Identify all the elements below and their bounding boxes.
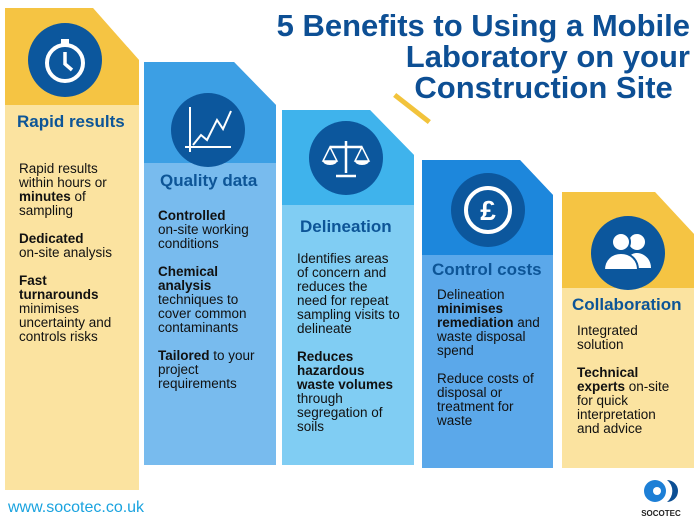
icon: chart xyxy=(171,93,245,167)
heading: Quality data xyxy=(160,171,257,190)
icon: scales xyxy=(309,121,383,195)
logo: SOCOTEC xyxy=(641,509,681,518)
text xyxy=(19,163,112,341)
decorative accent line xyxy=(393,93,431,124)
text: Integrated solution xyxy=(577,323,638,352)
title: 5 Benefits to Using a Mobile xyxy=(277,8,690,43)
title: Laboratory on your xyxy=(406,39,690,74)
icon: pound: £ xyxy=(480,195,496,226)
text: Reduce costs of disposal or treatment for waste xyxy=(437,371,534,428)
panel: control costs xyxy=(422,160,553,468)
panel: quality data xyxy=(144,62,276,465)
text: on-site working conditions xyxy=(158,222,249,251)
text: Reduces hazardous waste volumes through segregation of soils xyxy=(297,349,393,434)
text: on-site analysis xyxy=(19,245,112,260)
text: Fast turnarounds minimises uncertainty and controls risks xyxy=(19,273,111,344)
heading: Delineation xyxy=(300,217,392,236)
panel: collaboration xyxy=(562,192,694,468)
text xyxy=(577,325,669,433)
panel: delineation xyxy=(282,110,414,465)
icon: stopwatch xyxy=(28,23,102,97)
text: Rapid results within hours or minutes of sampling xyxy=(19,161,107,218)
text: Delineation minimises remediation and waste disposal spend xyxy=(437,287,540,358)
icon: people xyxy=(591,216,665,290)
heading: Collaboration xyxy=(572,295,682,314)
text: Technical experts on-site for quick interpretation and advice xyxy=(577,365,669,436)
heading: Control costs xyxy=(432,260,542,279)
text: Dedicated xyxy=(19,231,84,246)
panel: rapid results xyxy=(5,8,139,490)
text: Chemical analysis techniques to cover common contaminants xyxy=(158,264,247,335)
footer url: www.socotec.co.uk xyxy=(8,499,144,516)
logo xyxy=(641,480,681,518)
text xyxy=(158,210,254,391)
title xyxy=(277,8,690,105)
text xyxy=(297,253,400,431)
title: Construction Site xyxy=(414,70,673,105)
heading: Rapid results xyxy=(17,112,125,131)
icon: pound xyxy=(451,173,525,247)
text xyxy=(437,289,539,425)
text: Controlled xyxy=(158,208,226,223)
text: Identifies areas of concern and reduces the need for repeat sampling visits to delineate xyxy=(297,251,400,336)
text: Tailored to your project requirements xyxy=(158,348,255,391)
